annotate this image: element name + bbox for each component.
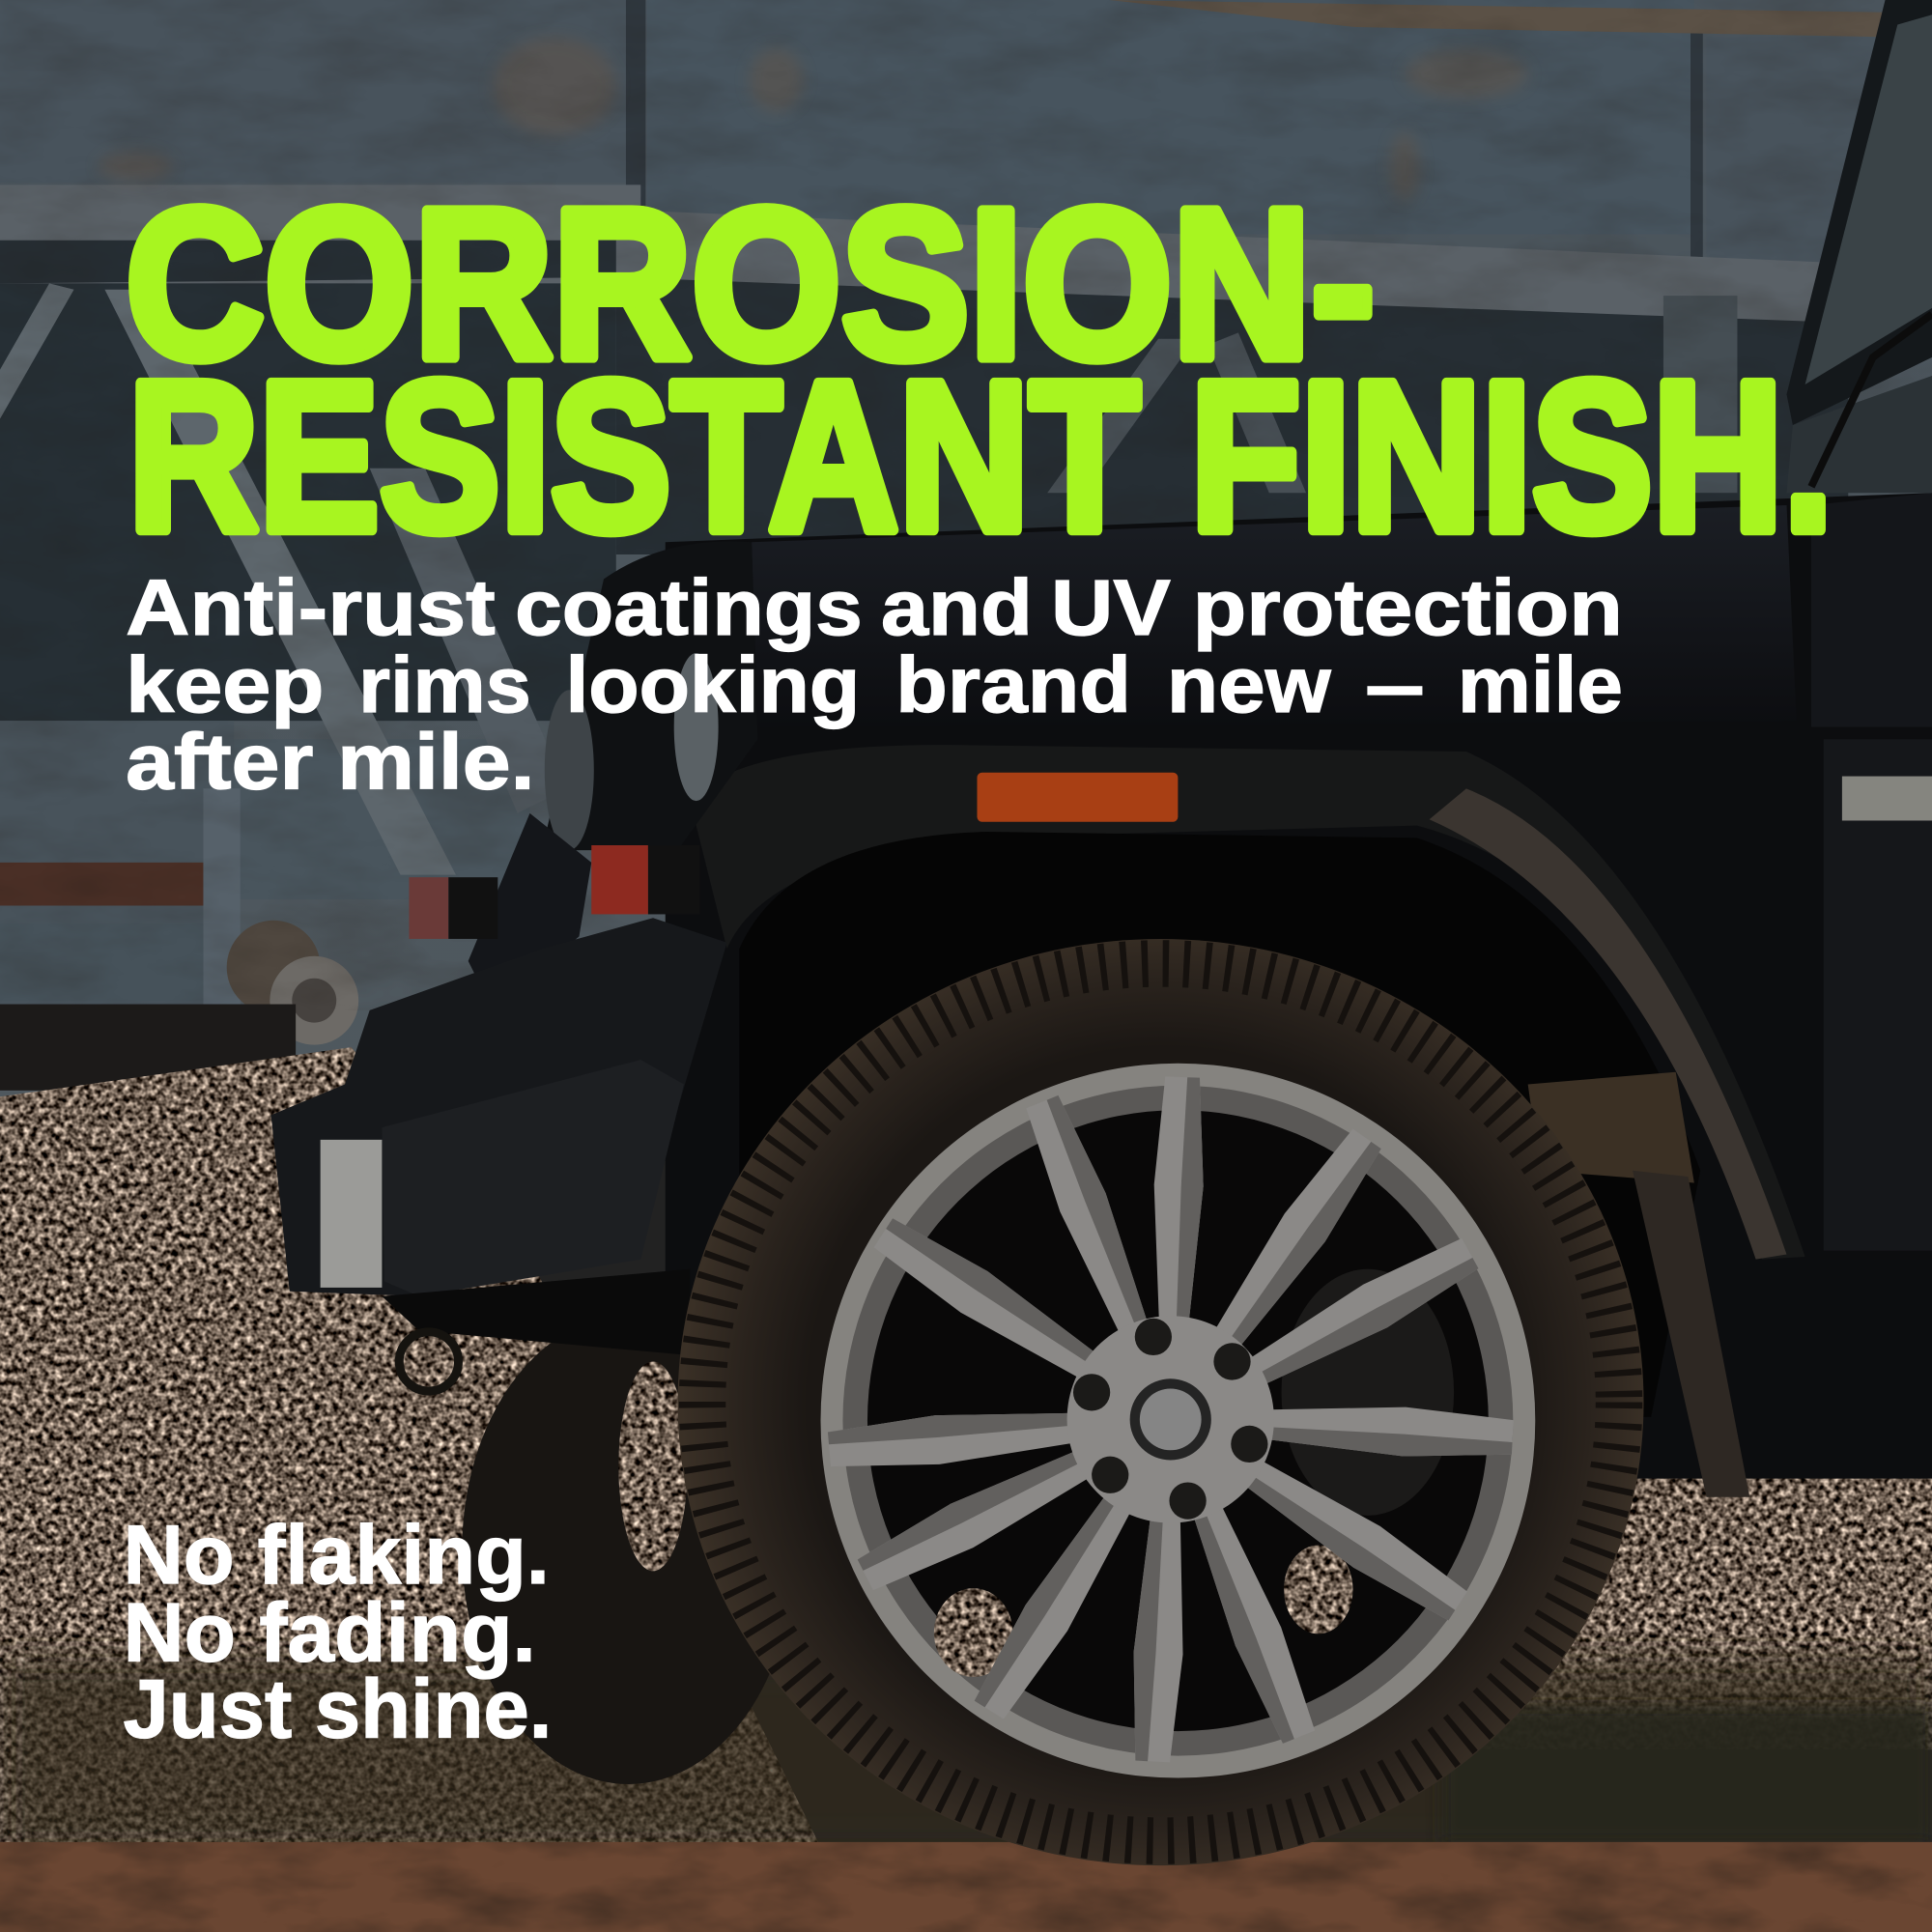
tagline text	[124, 1508, 552, 1755]
vehicle body	[666, 493, 1932, 1497]
badge on door	[1842, 777, 1932, 820]
subtitle text: new	[1167, 641, 1331, 729]
wheel: tyre, rim and spokes	[678, 939, 1644, 1865]
grille and headlights	[469, 541, 757, 1010]
side marker and signal lights	[409, 773, 1178, 939]
subtitle text: —	[1368, 641, 1422, 729]
tagline text: Just shine.	[124, 1662, 552, 1755]
subtitle text	[126, 564, 1623, 806]
rear-side inner tyre	[462, 1316, 795, 1784]
background: rusty steel wall	[0, 0, 1932, 1109]
tagline text: No fading.	[124, 1585, 536, 1679]
tagline text: No flaking.	[124, 1508, 550, 1602]
subtitle text: mile	[1458, 641, 1623, 729]
front bumper with number plate	[271, 918, 727, 1391]
subtitle text: protection	[1193, 564, 1623, 652]
background: gravel ground	[0, 1047, 1932, 1932]
subtitle text: keep	[126, 641, 324, 729]
title: CORROSION-	[126, 164, 1375, 403]
subtitle text: brand	[895, 641, 1131, 729]
subtitle text: coatings	[515, 564, 863, 652]
windshield and mirror	[1786, 0, 1932, 493]
spokes	[827, 1076, 1514, 1763]
rust patches	[99, 37, 1528, 201]
subtitle text: rims	[358, 641, 531, 729]
tread	[702, 963, 1619, 1841]
subtitle text: and	[881, 564, 1033, 652]
subtitle text: UV	[1051, 564, 1171, 652]
subtitle text: looking	[565, 641, 860, 729]
subtitle text: Anti-rust	[126, 564, 496, 652]
title	[126, 164, 1833, 575]
subtitle text: after mile.	[126, 718, 535, 806]
